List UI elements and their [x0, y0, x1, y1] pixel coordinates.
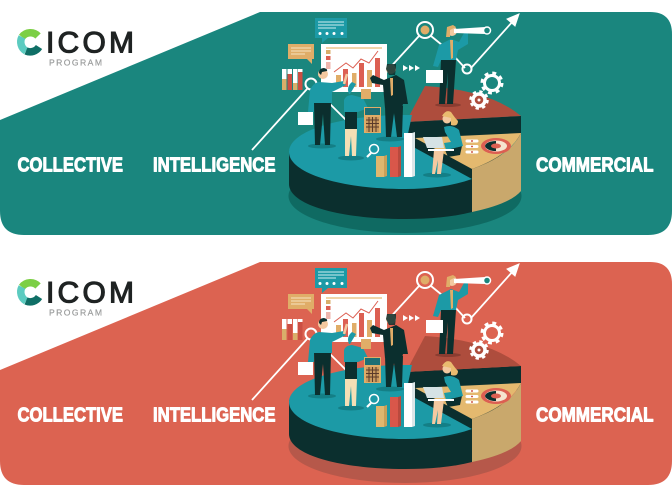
side face — [384, 155, 387, 177]
magnifier — [367, 144, 378, 157]
calculator screen — [365, 108, 380, 115]
speech bubble: teal — [315, 18, 347, 43]
dial center — [491, 144, 501, 148]
target dial — [481, 138, 511, 154]
legend swatch pink — [326, 62, 330, 69]
word: collective: COLLECTIVE — [18, 403, 123, 426]
bubble body — [315, 18, 347, 43]
telescope — [454, 27, 485, 34]
outer dial — [481, 138, 511, 154]
illustration: coral banner — [252, 264, 521, 469]
hair — [446, 25, 456, 37]
pie chart — [289, 86, 521, 219]
coin outlines — [467, 141, 477, 152]
handle — [367, 153, 371, 157]
gear teeth — [482, 73, 502, 93]
bar fills — [282, 79, 298, 90]
front face — [404, 133, 412, 177]
legs — [439, 60, 456, 104]
briefcase — [298, 112, 313, 125]
ground shadow — [376, 136, 404, 142]
ground shadow — [308, 144, 336, 148]
3d bar: red — [390, 146, 401, 177]
gear: red and white — [470, 92, 488, 108]
illustration: teal banner — [252, 14, 521, 219]
skirt — [445, 146, 462, 157]
trend line with arrow — [252, 14, 519, 150]
heading: teal banner — [18, 153, 654, 176]
dark back riser — [405, 116, 521, 182]
3d bar: white — [404, 132, 415, 177]
person: woman with tablet — [338, 82, 371, 160]
legs — [314, 102, 331, 145]
logo ring mark — [21, 33, 39, 52]
logo wordmark: ICOM — [46, 26, 134, 60]
tablet — [361, 89, 371, 99]
ground shadow — [423, 172, 451, 178]
person: bearded man — [370, 64, 408, 142]
panel: coral banner background — [0, 262, 672, 485]
trend node fill — [420, 26, 430, 34]
legend swatches — [326, 50, 330, 54]
person: man in teal shirt — [298, 68, 347, 148]
torso — [344, 95, 368, 112]
bubble dots — [320, 32, 342, 35]
dial core — [485, 141, 496, 151]
head — [386, 64, 396, 74]
tan slice side — [472, 133, 521, 212]
laptop — [423, 137, 444, 148]
brick slice — [406, 86, 521, 122]
head — [442, 114, 452, 124]
logo subtitle: PROGRAM — [49, 58, 102, 68]
red bars — [343, 58, 380, 87]
whiteboard chart — [321, 44, 387, 92]
logo: teal banner — [21, 26, 134, 68]
gear ring — [484, 76, 500, 90]
front face — [376, 156, 384, 177]
logo subtitle: PROGRAM — [49, 308, 102, 318]
word: intelligence: INTELLIGENCE — [153, 153, 276, 176]
coin centers — [471, 141, 473, 152]
torso and arm — [308, 81, 346, 112]
person: woman with laptop — [423, 111, 463, 178]
lens — [370, 144, 378, 154]
dark pie side — [289, 150, 472, 219]
ground shadow — [338, 156, 364, 160]
tan slice top — [415, 133, 521, 169]
tan bars — [336, 70, 372, 87]
legend swatch red — [326, 56, 330, 60]
calculator keys — [366, 117, 379, 132]
tie — [390, 78, 393, 96]
teal slice top — [289, 115, 472, 189]
jacket — [370, 75, 408, 108]
logo ring mark — [21, 283, 39, 302]
cream legs — [345, 129, 357, 156]
laptop base — [428, 149, 454, 151]
legs — [432, 150, 444, 174]
legs — [385, 106, 403, 137]
side face — [412, 132, 415, 177]
telescope lens — [484, 27, 490, 34]
head and hair — [348, 82, 356, 94]
raised arm — [344, 74, 347, 84]
pie shadow: coral banner — [288, 409, 522, 483]
logo wordmark: ICOM — [46, 276, 134, 310]
trend line — [334, 51, 378, 72]
ground shadow — [435, 103, 461, 107]
pie shadow: teal banner — [288, 159, 522, 233]
board — [321, 44, 387, 92]
panel: teal banner background — [0, 12, 672, 235]
chevrons — [403, 65, 420, 71]
hair and beard — [386, 64, 396, 75]
speech bubble: tan — [288, 44, 314, 64]
calculator body — [364, 107, 381, 133]
hair — [442, 111, 458, 126]
mini bar chart — [282, 69, 302, 90]
bar columns — [282, 69, 302, 90]
word: collective: COLLECTIVE — [18, 153, 123, 176]
small coin stack — [467, 141, 477, 152]
calculator key grid — [366, 117, 379, 132]
hair — [319, 68, 327, 75]
torso — [444, 126, 463, 150]
3d bar: tan — [376, 155, 387, 177]
torso — [433, 33, 468, 67]
bar fills red — [288, 72, 302, 90]
front face — [390, 147, 398, 177]
board header line — [326, 47, 382, 49]
bubble lines — [318, 22, 344, 28]
head — [318, 69, 328, 79]
heading: coral banner — [18, 403, 654, 426]
gear ring — [473, 94, 485, 106]
calculator — [364, 107, 381, 133]
inner dial — [485, 140, 507, 152]
head — [447, 26, 457, 36]
briefcase — [426, 70, 443, 83]
side face — [398, 146, 401, 177]
skirt — [345, 111, 357, 129]
gear hub — [478, 98, 480, 102]
tie — [450, 40, 453, 59]
bubble lines — [291, 48, 311, 54]
gear: white — [482, 73, 502, 93]
bubble body — [288, 44, 314, 64]
word: intelligence: INTELLIGENCE — [153, 403, 276, 426]
person: man with telescope — [426, 25, 490, 107]
logo: coral banner — [21, 276, 134, 318]
gear teeth — [470, 92, 488, 108]
